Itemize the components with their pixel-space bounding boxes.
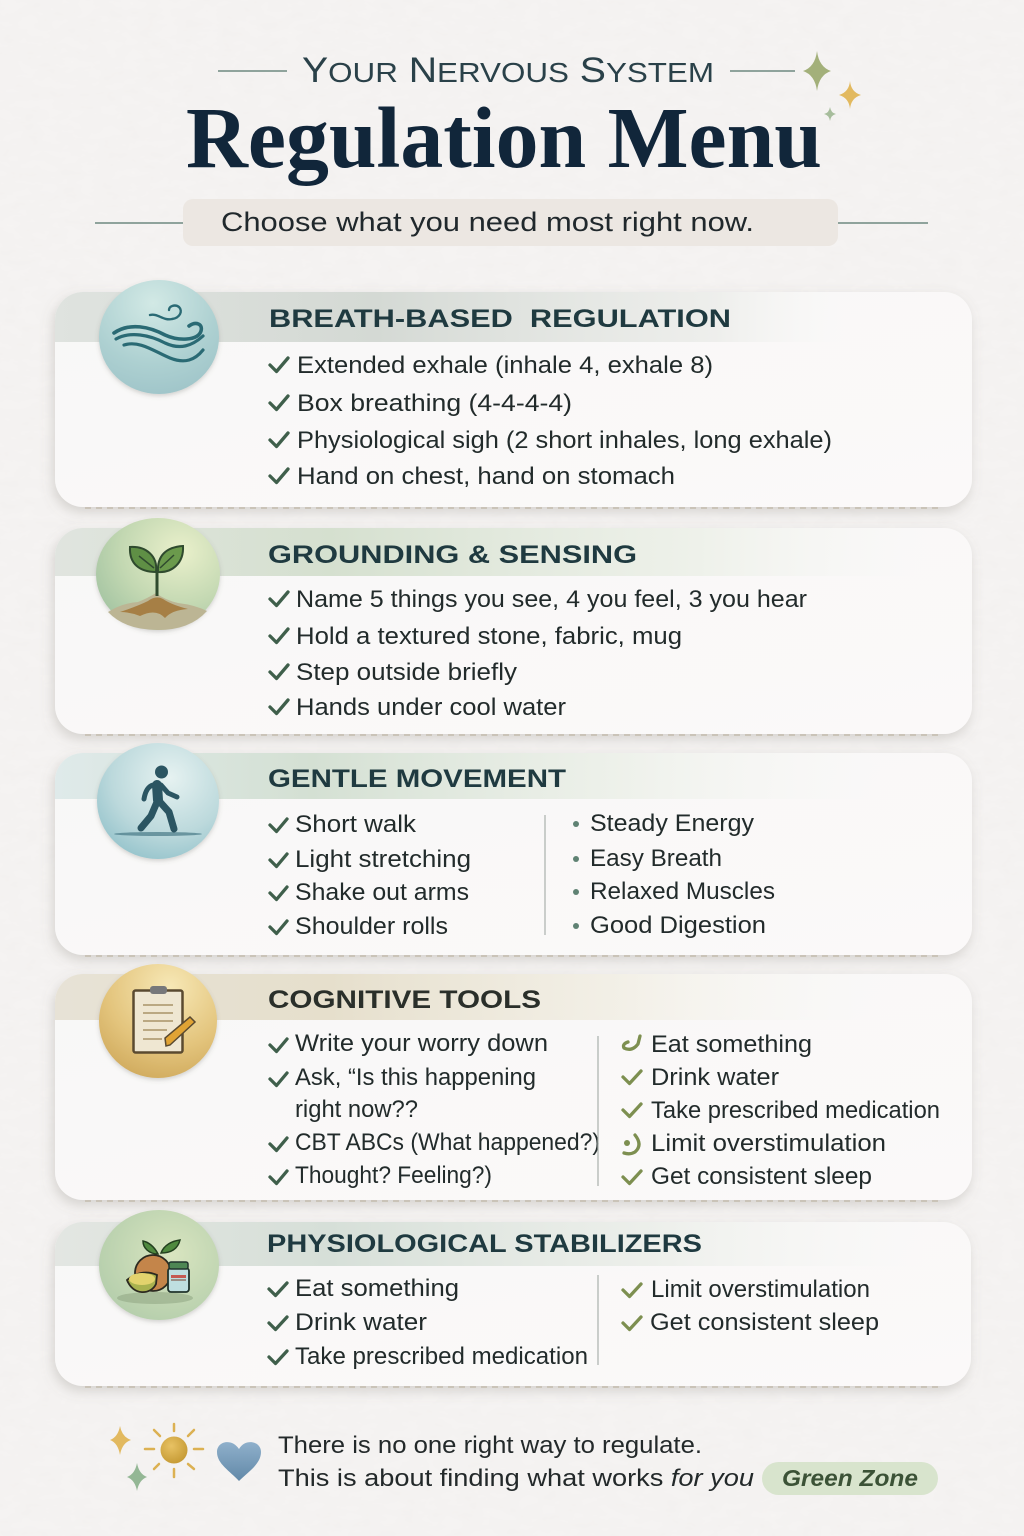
checklist	[270, 811, 471, 940]
bullet list: signs: Easy Breath	[590, 845, 722, 872]
panel: cognitive tools	[55, 964, 972, 1201]
subtitle pill: Choose what you need most right now.	[221, 207, 754, 237]
checklist: Ask, “Is this happening	[295, 1064, 536, 1091]
checklist: right now??	[295, 1096, 418, 1123]
panel: physiological stabilizers	[55, 1210, 971, 1387]
heading: GENTLE MOVEMENT	[268, 765, 566, 793]
checklist: Write your worry down	[295, 1030, 548, 1057]
icon: sparkles	[803, 51, 861, 121]
eyebrow: your nervous system: YOUR NERVOUS SYSTEM	[302, 51, 714, 90]
icon: sun, sparkles and heart	[110, 1424, 261, 1491]
panel: breath-based regulation	[55, 280, 972, 508]
badge: green zone	[762, 1462, 938, 1495]
checklist	[270, 352, 832, 490]
panel: gentle movement	[55, 743, 972, 956]
checklist: right column: Drink water	[651, 1064, 779, 1091]
checklist: Box breathing (4-4-4-4)	[297, 390, 572, 417]
checklist: Name 5 things you see, 4 you feel, 3 you hear	[296, 586, 807, 613]
closing message: There is no one right way to regulate.	[278, 1432, 702, 1459]
checklist	[270, 1030, 600, 1189]
checklist: Drink water	[295, 1309, 427, 1336]
bullet list: signs: Relaxed Muscles	[590, 878, 775, 905]
checklist: CBT ABCs (What happened?)	[295, 1129, 600, 1156]
icon: food and medicine	[99, 1210, 219, 1320]
icon: sprout	[96, 518, 220, 630]
badge: green zone: Green Zone	[782, 1465, 918, 1491]
icon: wind	[99, 280, 219, 394]
checklist: Short walk	[295, 811, 417, 838]
checklist: Eat something	[295, 1275, 459, 1302]
checklist: Thought? Feeling?)	[295, 1162, 492, 1189]
checklist: Step outside briefly	[296, 659, 517, 686]
heading: BREATH-BASED REGULATION	[269, 305, 731, 333]
checklist: right column	[623, 1031, 940, 1190]
main title: Regulation Menu	[186, 89, 822, 186]
checklist	[270, 586, 807, 721]
checklist: right column: Take prescribed medication	[651, 1097, 940, 1124]
checklist: Hand on chest, hand on stomach	[297, 463, 675, 490]
checklist: Extended exhale (inhale 4, exhale 8)	[297, 352, 713, 379]
heading: COGNITIVE TOOLS	[268, 986, 541, 1014]
closing message	[278, 1432, 754, 1492]
checklist: right column: Limit overstimulation	[651, 1130, 886, 1157]
checklist: Light stretching	[295, 846, 471, 873]
heading: PHYSIOLOGICAL STABILIZERS	[267, 1230, 702, 1258]
bullet list: signs: Steady Energy	[590, 810, 754, 837]
checklist: Shake out arms	[295, 879, 469, 906]
checklist: Physiological sigh (2 short inhales, long exhale)	[297, 427, 832, 454]
checklist: right column: Get consistent sleep	[650, 1309, 879, 1336]
checklist: Shoulder rolls	[295, 913, 448, 940]
checklist: right column: Get consistent sleep	[651, 1163, 872, 1190]
subtitle pill	[95, 199, 928, 246]
panel: grounding and sensing	[55, 518, 972, 735]
icon: walking figure	[97, 743, 219, 859]
closing message: This is about finding what works for you	[278, 1465, 754, 1492]
checklist: Hands under cool water	[296, 694, 566, 721]
checklist	[269, 1275, 588, 1370]
bullet list: signs: Good Digestion	[590, 912, 766, 939]
heading: GROUNDING & SENSING	[268, 541, 637, 569]
checklist: right column: Limit overstimulation	[651, 1276, 870, 1303]
checklist: Take prescribed medication	[295, 1343, 588, 1370]
bullet list: signs	[573, 810, 775, 939]
title block	[186, 51, 822, 186]
icon: clipboard	[99, 964, 217, 1078]
checklist: right column: Eat something	[651, 1031, 812, 1058]
checklist: right column	[623, 1276, 879, 1336]
checklist: Hold a textured stone, fabric, mug	[296, 623, 682, 650]
